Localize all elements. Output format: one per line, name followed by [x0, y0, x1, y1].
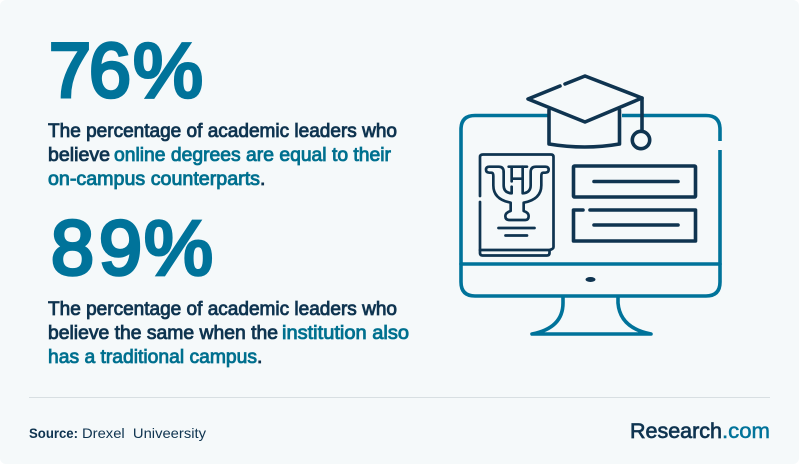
- monitor camera dot: [586, 277, 596, 282]
- icon: computer monitor with graduation cap and book: [461, 76, 720, 334]
- graduation cap: [528, 76, 650, 149]
- description: first stat: online degrees are equal to their: [114, 144, 391, 166]
- psi glyph: [486, 167, 549, 220]
- description: first stat: .: [260, 168, 265, 190]
- stat: 89%: [51, 206, 213, 292]
- stat: 76%: [49, 28, 203, 114]
- description: first stat: [48, 120, 397, 190]
- description: first stat: on-campus counterparts: [48, 168, 260, 190]
- stat: 76%: %: [133, 28, 203, 114]
- description: first stat: The percentage of academic leaders who: [48, 120, 397, 142]
- monitor frame: [461, 116, 720, 334]
- description: second stat: believe the same when the: [48, 322, 278, 344]
- source text: Drexel Univeersity: [82, 425, 206, 441]
- logo: Research.com: .com: [722, 419, 770, 443]
- description: second stat: institution also: [282, 322, 409, 344]
- description: first stat: believe: [48, 144, 110, 166]
- stat: 89%: 9: [99, 206, 142, 292]
- source text: [29, 425, 206, 441]
- stat: 76%: 6: [89, 28, 131, 114]
- description: second stat: [48, 298, 409, 368]
- description: second stat: .: [257, 346, 262, 368]
- text field 1: [574, 166, 696, 197]
- stat: 89%: 8: [51, 206, 94, 292]
- stat: 76%: 7: [49, 28, 91, 114]
- logo: Research.com: [630, 419, 770, 443]
- source text: Source:: [29, 425, 78, 441]
- description: second stat: The percentage of academic leaders who: [48, 298, 397, 320]
- stat: 89%: %: [144, 206, 213, 292]
- book with psi symbol: [480, 154, 554, 256]
- divider: [29, 396, 770, 398]
- logo: Research.com: Research: [630, 419, 722, 443]
- text field 2: [574, 210, 696, 241]
- description: second stat: has a traditional campus: [48, 346, 257, 368]
